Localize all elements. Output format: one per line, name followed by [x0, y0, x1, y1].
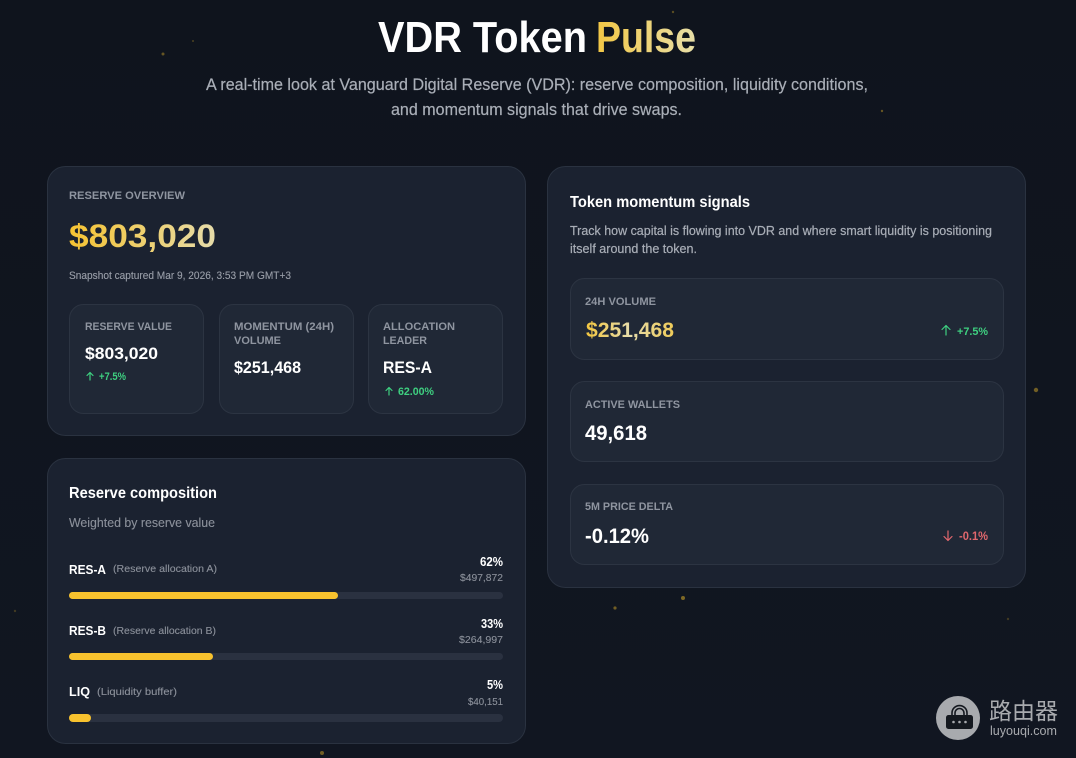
row: RES-A	[69, 555, 503, 599]
row: RES-A: (Reserve allocation A)	[113, 563, 217, 575]
composition heading: Reserve composition	[69, 485, 217, 502]
card: momentum volume	[220, 304, 354, 414]
composition subheading: Weighted by reserve value	[69, 516, 215, 530]
card: momentum volume: MOMENTUM (24H)	[234, 321, 334, 333]
momentum description: itself around the token.	[570, 242, 697, 256]
row: RES-A: 62%	[480, 555, 503, 569]
snapshot timestamp: Snapshot captured Mar 9, 2026, 3:53 PM GMT+3	[69, 270, 291, 282]
card: 5m price delta: -0.1%	[959, 529, 988, 543]
card: active wallets	[570, 382, 1004, 462]
subtitle	[206, 76, 868, 119]
card: 24h volume	[570, 278, 1004, 360]
row: RES-A: $497,872	[460, 572, 503, 584]
overview total value: $803,020	[69, 218, 216, 254]
watermark logo	[936, 696, 1058, 740]
title: VDR Token	[378, 13, 587, 62]
card: reserve value: +7.5%	[99, 371, 126, 383]
row: RES-B: 33%	[481, 617, 503, 631]
row: LIQ	[69, 678, 503, 722]
card: allocation leader: RES-A	[383, 358, 432, 377]
panel: reserve overview	[48, 166, 526, 436]
icon: up arrow	[942, 326, 950, 335]
card: active wallets: 49,618	[585, 422, 647, 445]
row: LIQ: $40,151	[468, 696, 503, 708]
watermark logo: luyouqi.com	[990, 724, 1057, 738]
row: LIQ: 5%	[487, 678, 503, 692]
momentum description	[570, 224, 992, 256]
card: allocation leader	[368, 304, 502, 414]
card: 5m price delta	[570, 484, 1004, 564]
card: allocation leader: LEADER	[383, 335, 427, 347]
row: RES-B: RES-B	[69, 624, 106, 638]
card: 24h volume: $251,468	[586, 319, 674, 342]
momentum description: Track how capital is flowing into VDR and where smart liquidity is positioning	[570, 224, 992, 238]
card: active wallets: ACTIVE WALLETS	[585, 399, 680, 411]
card: reserve value: $803,020	[85, 344, 158, 363]
card: allocation leader: ALLOCATION	[383, 321, 455, 333]
card: 5m price delta: -0.12%	[585, 525, 649, 548]
card: 24h volume: 24H VOLUME	[585, 296, 656, 308]
card: momentum volume: $251,468	[234, 358, 301, 377]
card: reserve value	[70, 304, 204, 414]
card: momentum volume: VOLUME	[234, 335, 281, 347]
card: 24h volume: +7.5%	[957, 326, 988, 338]
row: RES-B: (Reserve allocation B)	[113, 625, 216, 637]
watermark logo: 路由器	[989, 698, 1058, 724]
row: LIQ: (Liquidity buffer)	[97, 686, 177, 698]
icon: up arrow	[386, 388, 392, 395]
row: RES-B	[69, 617, 503, 660]
subtitle: A real-time look at Vanguard Digital Reserve (VDR): reserve composition, liquidity conditions,	[206, 76, 868, 94]
overview label: RESERVE OVERVIEW	[69, 190, 186, 202]
card: 5m price delta: 5M PRICE DELTA	[585, 501, 673, 513]
row: LIQ: LIQ	[69, 685, 90, 699]
card: reserve value: RESERVE VALUE	[85, 321, 172, 333]
icon: up arrow	[87, 372, 93, 380]
momentum heading: Token momentum signals	[570, 194, 750, 211]
icon: down arrow	[944, 531, 952, 540]
row: RES-B: $264,997	[459, 634, 503, 646]
subtitle: and momentum signals that drive swaps.	[391, 101, 682, 119]
panel: reserve composition	[48, 458, 526, 744]
panel: token momentum signals	[548, 166, 1026, 588]
title accent: Pulse	[596, 13, 696, 62]
card: allocation leader: 62.00%	[398, 386, 434, 398]
row: RES-A: RES-A	[69, 563, 106, 577]
